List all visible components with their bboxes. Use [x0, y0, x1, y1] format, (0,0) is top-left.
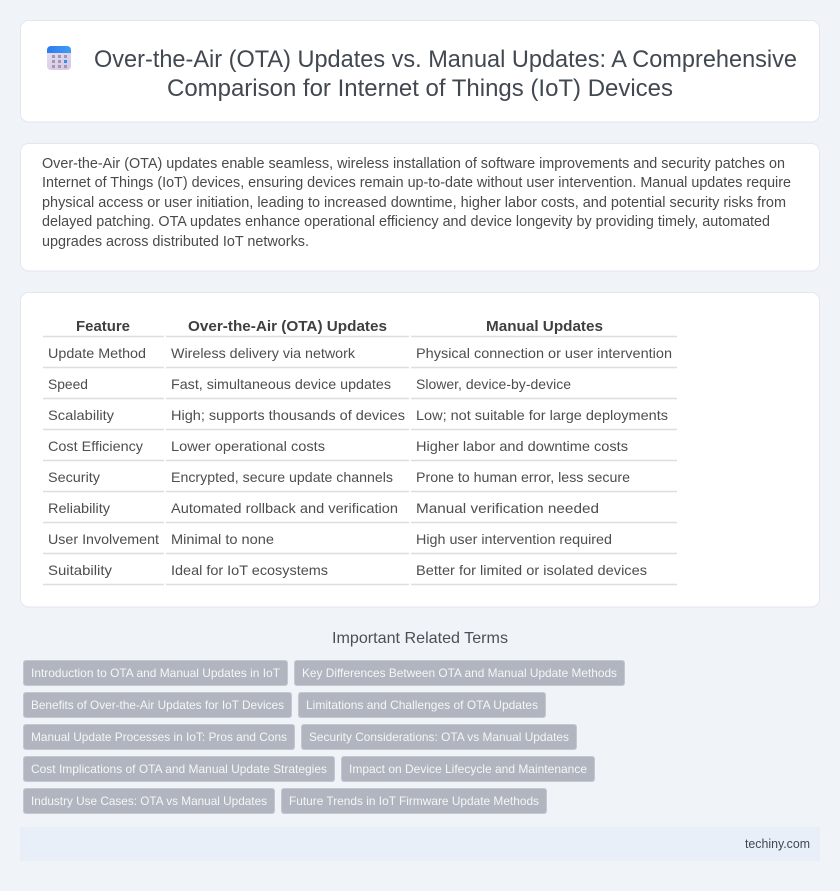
- tag: [282, 788, 546, 814]
- tag: Industry Use Cases: OTA vs Manual Updates: [31, 794, 267, 808]
- table header row: Over-the-Air (OTA) Updates: [188, 318, 387, 335]
- footer bar: [20, 827, 820, 861]
- panel: introduction text: upgrades across distributed IoT networks.: [42, 234, 309, 250]
- row: update method: Physical connection or user intervention: [416, 345, 672, 361]
- row: reliability: Reliability: [48, 500, 110, 516]
- row: cost efficiency: [48, 438, 628, 454]
- tag: [24, 788, 274, 814]
- row: speed: Slower, device-by-device: [416, 376, 571, 392]
- row: security: [48, 469, 630, 485]
- row: speed: Speed: [48, 376, 88, 392]
- title: Over-the-Air (OTA) Updates vs. Manual Updates: A Comprehensive: [94, 46, 797, 73]
- panel: comparison table: [20, 292, 820, 607]
- row: user involvement: High user intervention required: [416, 531, 612, 547]
- row: scalability: [48, 407, 668, 423]
- tag: Benefits of Over-the-Air Updates for IoT Devices: [31, 698, 284, 712]
- tag: Security Considerations: OTA vs Manual Updates: [309, 730, 569, 744]
- title: [94, 46, 797, 102]
- panel: introduction text: Over-the-Air (OTA) updates enable seamless, wireless installation of software improvements and security patches on: [42, 156, 785, 172]
- row: cost efficiency: Higher labor and downtime costs: [416, 438, 628, 454]
- row: update method: Wireless delivery via network: [171, 345, 356, 361]
- row: reliability: Manual verification needed: [416, 500, 599, 516]
- table header row: [76, 318, 603, 335]
- table header row: Manual Updates: [486, 318, 603, 335]
- panel: introduction text: delayed patching. OTA updates enhance operational efficiency and device longevity by providing timely, automated: [42, 214, 770, 230]
- tag: [24, 660, 288, 686]
- row: security: Prone to human error, less secure: [416, 469, 630, 485]
- tag: [24, 756, 334, 782]
- row: cost efficiency: Cost Efficiency: [48, 438, 143, 454]
- footer bar: techiny.com: [745, 837, 810, 851]
- tag: Limitations and Challenges of OTA Updates: [306, 698, 538, 712]
- row: reliability: [48, 500, 599, 516]
- panel: introduction text: Internet of Things (IoT) devices, ensuring devices remain up-to-date without user intervention. Manual updates require: [42, 175, 791, 191]
- row: update method: [48, 345, 672, 361]
- tag: Key Differences Between OTA and Manual Update Methods: [302, 666, 617, 680]
- panel: introduction text: [20, 144, 820, 271]
- title: Comparison for Internet of Things (IoT) Devices: [167, 75, 673, 102]
- row: scalability: Low; not suitable for large deployments: [416, 407, 668, 423]
- row: user involvement: Minimal to none: [171, 531, 274, 547]
- table header row: Feature: [76, 318, 130, 335]
- heading: important related terms: Important Related Terms: [332, 630, 508, 647]
- row: speed: Fast, simultaneous device updates: [171, 376, 391, 392]
- icon: calendar: [47, 46, 71, 70]
- tag: [302, 724, 576, 750]
- row: reliability: Automated rollback and verification: [171, 500, 398, 516]
- row: suitability: Better for limited or isolated devices: [416, 562, 647, 578]
- panel: introduction text: physical access or user initiation, leading to increased downtime, higher labor costs, and potential security risks from: [42, 195, 786, 211]
- row: security: Security: [48, 469, 100, 485]
- row: security: Encrypted, secure update channels: [171, 469, 393, 485]
- tag: [24, 692, 292, 718]
- row: speed: [48, 376, 571, 392]
- row: user involvement: [48, 531, 612, 547]
- row: scalability: High; supports thousands of devices: [171, 407, 405, 423]
- row: suitability: Ideal for IoT ecosystems: [171, 562, 328, 578]
- tag: Impact on Device Lifecycle and Maintenance: [349, 762, 587, 776]
- tag: Cost Implications of OTA and Manual Update Strategies: [31, 762, 327, 776]
- row: scalability: Scalability: [48, 407, 114, 423]
- row: suitability: [48, 562, 647, 578]
- tag: [342, 756, 594, 782]
- panel: header: [20, 20, 820, 122]
- row: suitability: Suitability: [48, 562, 112, 578]
- tag: Future Trends in IoT Firmware Update Methods: [289, 794, 539, 808]
- tag: [294, 660, 624, 686]
- row: user involvement: User Involvement: [48, 531, 159, 547]
- related term tags: [24, 660, 624, 814]
- tag: Manual Update Processes in IoT: Pros and Cons: [31, 730, 287, 744]
- row: update method: Update Method: [48, 345, 146, 361]
- tag: Introduction to OTA and Manual Updates in IoT: [31, 666, 281, 680]
- tag: [24, 724, 294, 750]
- row: cost efficiency: Lower operational costs: [171, 438, 325, 454]
- tag: [298, 692, 546, 718]
